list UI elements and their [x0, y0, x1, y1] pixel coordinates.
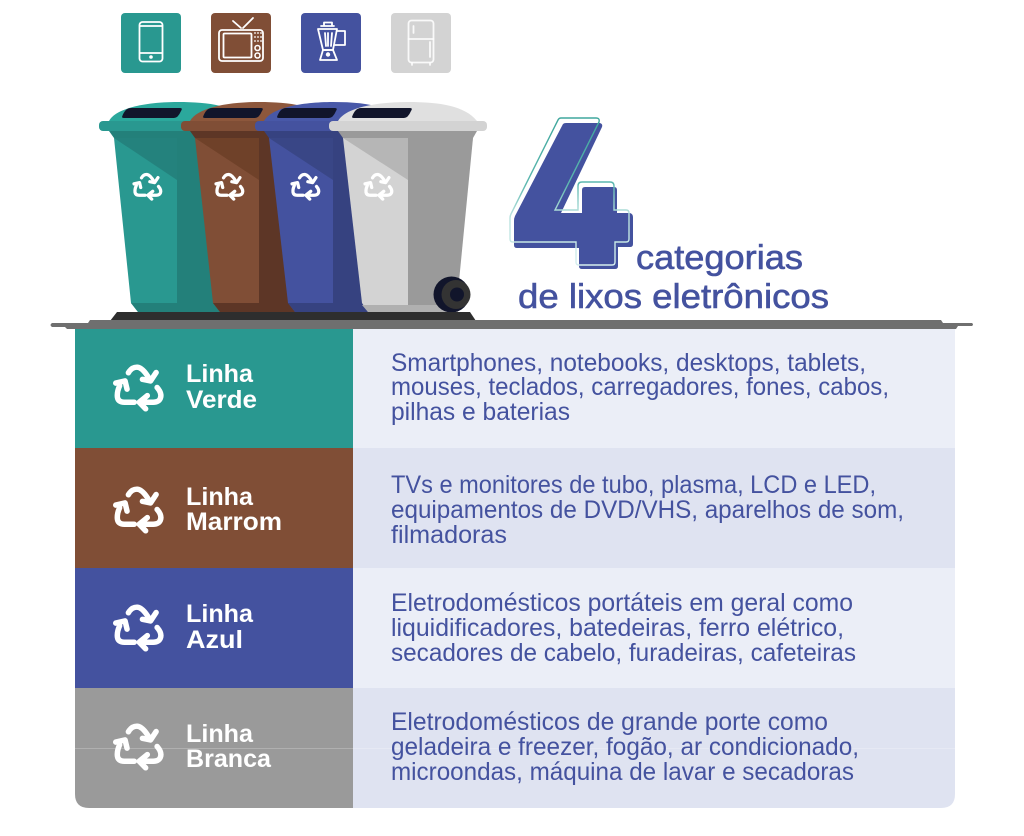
icon: television — [211, 13, 271, 73]
shelf — [50, 312, 973, 329]
row: Linha Branca: Linha — [186, 720, 254, 748]
row: Linha Verde: Smartphones, notebooks, desktops, tablets, — [391, 349, 866, 377]
table of categories — [75, 329, 955, 808]
row: Linha Azul: secadores de cabelo, furadeiras, cafeteiras — [391, 639, 856, 667]
row: Linha Azul: Azul — [186, 626, 243, 654]
big numeral 4 — [510, 118, 633, 269]
row: Linha Marrom: filmadoras — [391, 521, 507, 549]
title text: de lixos eletrônicos — [518, 278, 829, 316]
wheel — [434, 276, 470, 312]
row: Linha Verde: mouses, teclados, carregadores, fones, cabos, — [391, 373, 889, 401]
icon row: device categories — [121, 13, 451, 73]
row: Linha Marrom: Linha — [186, 483, 254, 511]
row: Linha Branca — [75, 688, 955, 808]
grey bin — [329, 102, 487, 312]
row: Linha Marrom: Marrom — [186, 508, 282, 536]
green bin — [99, 102, 257, 312]
row: Linha Marrom: TVs e monitores de tubo, plasma, LCD e LED, — [391, 471, 876, 499]
row: Linha Marrom: equipamentos de DVD/VHS, aparelhos de som, — [391, 496, 904, 524]
brown bin — [181, 102, 339, 312]
icon: refrigerator — [391, 13, 451, 73]
row: Linha Azul: Linha — [186, 600, 254, 628]
recycling bins illustration — [99, 102, 487, 312]
row: Linha Azul: Eletrodomésticos portáteis em geral como — [391, 589, 853, 617]
icon: blender — [301, 13, 361, 73]
row: Linha Verde — [75, 329, 955, 448]
row: Linha Verde: Linha — [186, 360, 254, 388]
title text — [518, 239, 829, 316]
row: Linha Azul — [75, 568, 955, 688]
icon: smartphone — [121, 13, 181, 73]
row: Linha Branca: Eletrodomésticos de grande porte como — [391, 708, 828, 736]
row: Linha Verde: pilhas e baterias — [391, 398, 570, 426]
title text: categorias — [636, 239, 803, 277]
row: Linha Verde: Verde — [186, 386, 257, 414]
blue bin — [255, 102, 413, 312]
row: Linha Branca: Branca — [186, 745, 272, 773]
row: Linha Azul: liquidificadores, batedeiras, ferro elétrico, — [391, 614, 844, 642]
row: Linha Branca: geladeira e freezer, fogão, ar condicionado, — [391, 733, 859, 761]
row: Linha Marrom — [75, 448, 955, 568]
row: Linha Branca: microondas, máquina de lavar e secadoras — [391, 758, 854, 786]
